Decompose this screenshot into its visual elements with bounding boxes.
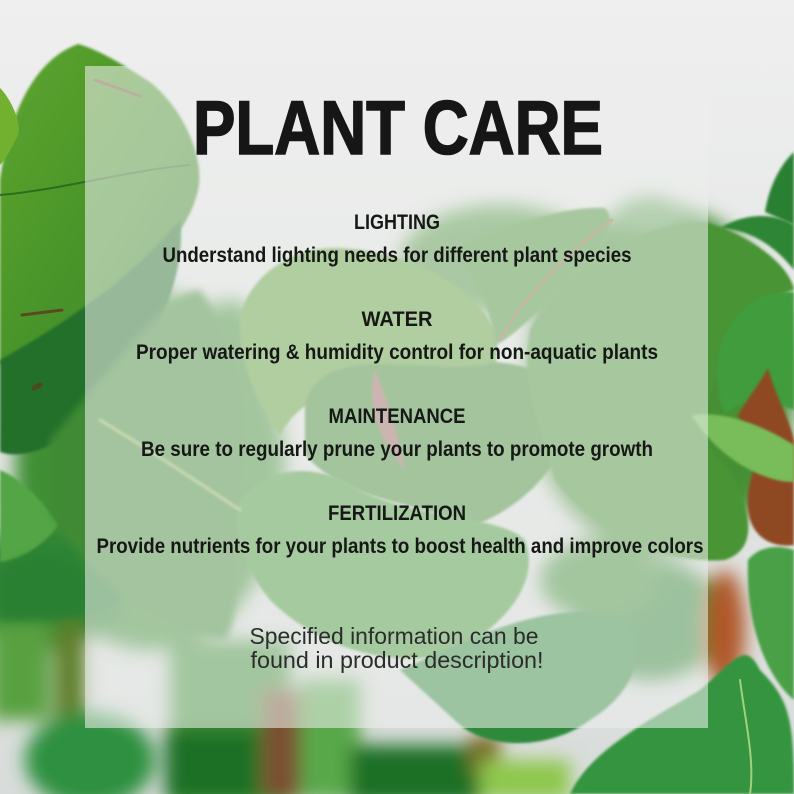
- footer note: Specified information can be: [250, 623, 538, 649]
- leaf: centre upper: [240, 248, 497, 435]
- leaf: lower left blurred: [50, 290, 248, 640]
- translucent white panel: [85, 66, 708, 728]
- leaf: upper right of centre: [450, 208, 610, 345]
- section: lighting: Understand lighting needs for different plant species: [162, 244, 632, 267]
- leaf: centre: [305, 362, 568, 527]
- section: water: Proper watering & humidity control for non-aquatic plants: [136, 341, 658, 364]
- leaf: right large: [527, 222, 794, 560]
- section: maintenance: [141, 405, 653, 461]
- footer note: found in product description!: [250, 647, 544, 673]
- leaf: red centre bud: [372, 370, 405, 470]
- leaf: pale right tip: [692, 414, 794, 482]
- section: water: WATER: [362, 308, 432, 331]
- stem: red leaf accent: [738, 368, 794, 546]
- section: lighting: [162, 211, 632, 267]
- section: maintenance: Be sure to regularly prune your plants to promote growth: [141, 438, 653, 461]
- leaf: far left small: [0, 470, 58, 562]
- section: maintenance: MAINTENANCE: [328, 405, 466, 428]
- footer note: [250, 623, 544, 673]
- leaf: lower left: [0, 220, 181, 454]
- section: fertilization: [96, 502, 704, 558]
- section: lighting: LIGHTING: [354, 211, 440, 234]
- leaf: right edge: [717, 292, 794, 415]
- leaf: bottom right: [400, 612, 637, 743]
- section: fertilization: FERTILIZATION: [328, 502, 466, 525]
- section: fertilization: Provide nutrients for your plants to boost health and improve colors: [96, 535, 704, 558]
- section: water: [136, 308, 658, 364]
- leaf: large top-left: [0, 44, 199, 365]
- leaf: bottom centre round: [237, 471, 529, 659]
- title: PLANT CARE: [193, 86, 603, 171]
